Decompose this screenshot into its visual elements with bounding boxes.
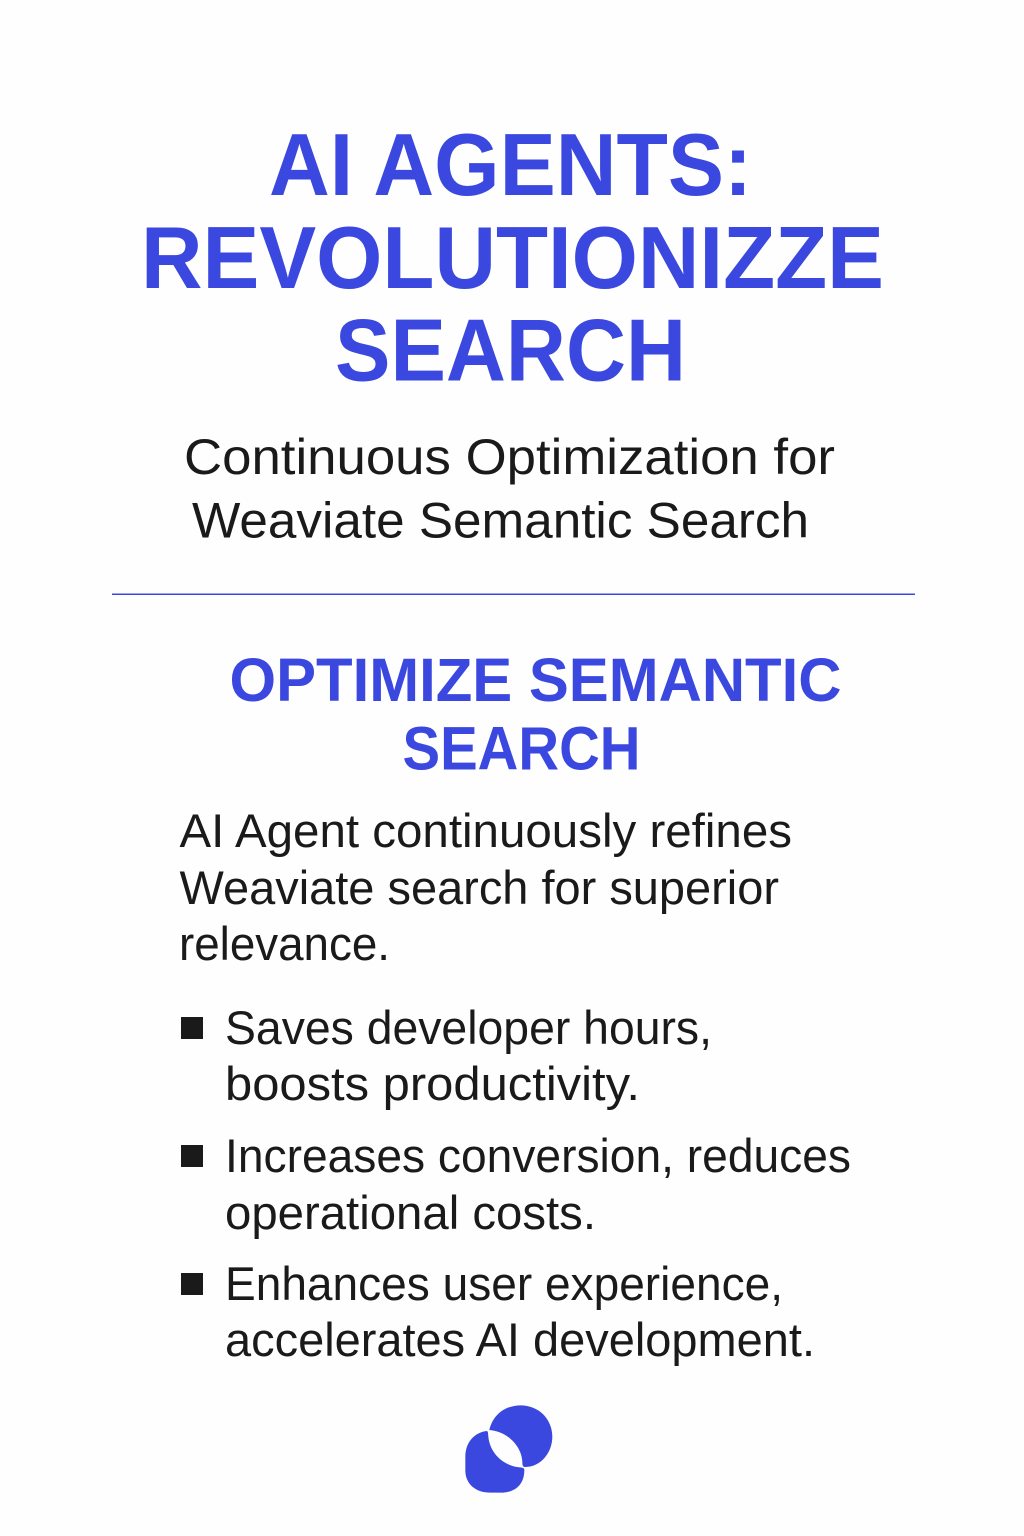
intro paragraph: relevance.	[179, 917, 390, 970]
section heading	[230, 646, 842, 782]
bullet: user experience	[181, 1257, 815, 1366]
title: AI AGENTS:	[269, 115, 752, 214]
icon: logo	[465, 1405, 552, 1493]
section heading: OPTIMIZE SEMANTIC	[230, 646, 842, 714]
title: REVOLUTIONIZZE	[141, 208, 884, 307]
bullet: conversion and costs: Increases conversion, reduces	[225, 1129, 851, 1182]
intro paragraph: Weaviate search for superior	[180, 861, 779, 914]
bullet: conversion and costs: operational costs.	[225, 1186, 596, 1239]
bullet: user experience: Enhances user experience,	[225, 1257, 783, 1310]
section heading: SEARCH	[402, 714, 640, 782]
bullet: conversion and costs	[181, 1129, 851, 1239]
bullet list	[181, 1001, 851, 1366]
title	[141, 115, 884, 400]
bullet: developer hours: boosts productivity.	[225, 1057, 640, 1110]
bullet: developer hours	[181, 1001, 712, 1110]
subtitle	[184, 429, 835, 548]
bullet: developer hours: Saves developer hours,	[225, 1001, 712, 1054]
subtitle: Continuous Optimization for	[184, 429, 835, 485]
subtitle: Weaviate Semantic Search	[192, 492, 809, 548]
title: SEARCH	[335, 300, 686, 400]
bullet: user experience: accelerates AI development.	[225, 1313, 815, 1366]
intro paragraph: AI Agent continuously refines	[180, 804, 792, 857]
intro paragraph	[179, 804, 792, 970]
